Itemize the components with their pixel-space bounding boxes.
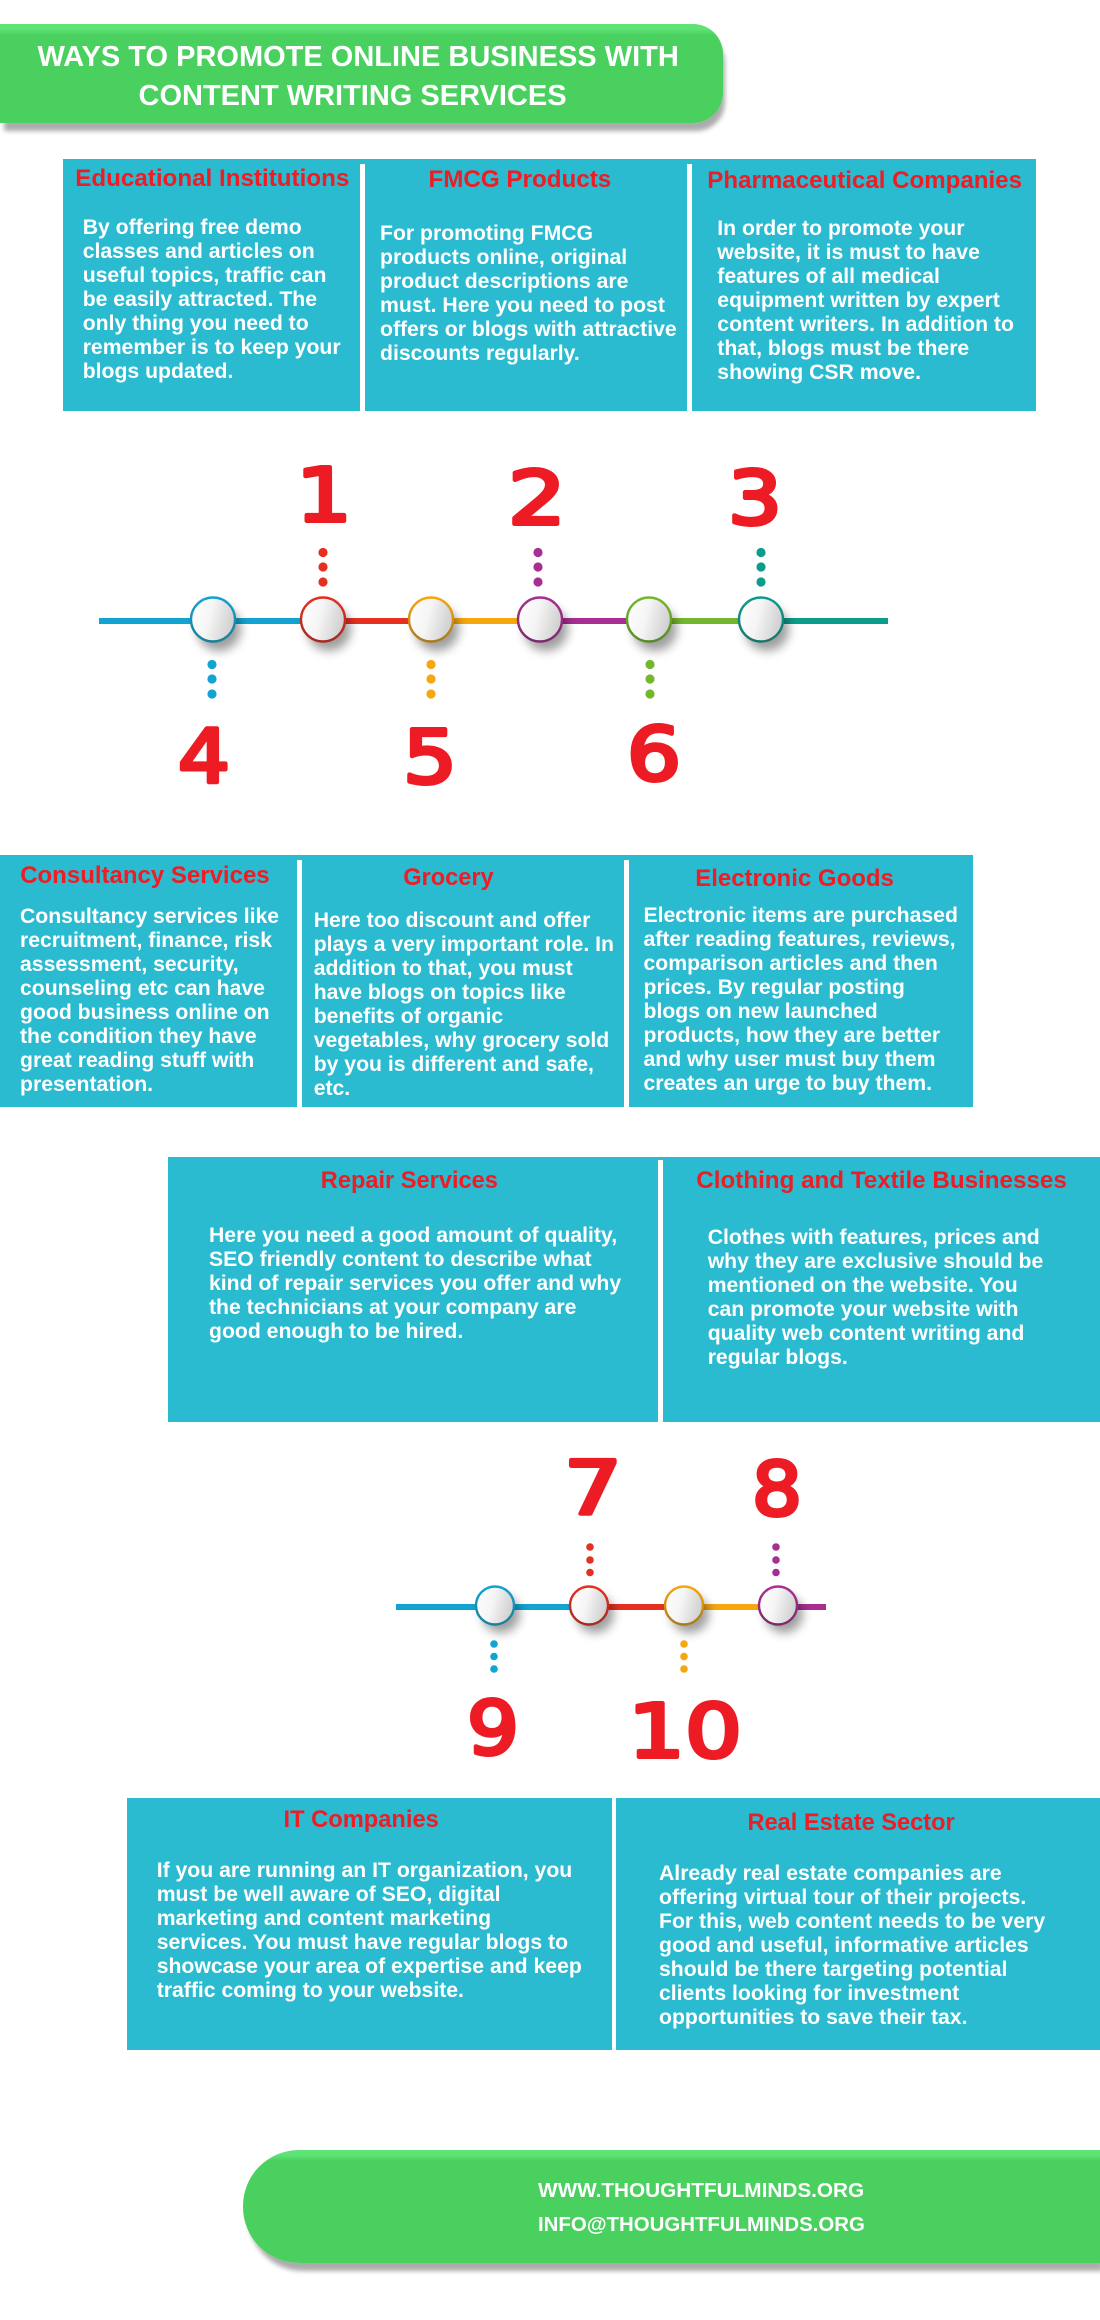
body text: remember is to keep your [83,336,341,359]
title text: CONTENT WRITING SERVICES [138,80,567,112]
node 2 [508,456,568,651]
body text [20,905,279,1096]
node 7 [564,1446,622,1633]
body text: showing CSR move. [717,361,921,384]
node 10 [628,1586,742,1775]
body text [380,222,677,365]
body text: presentation. [20,1073,153,1096]
body text: equipment written by expert [717,289,1000,312]
body text: clients looking for investment [659,1982,959,2005]
node 4: 4 [178,714,230,800]
title text: WAYS TO PROMOTE ONLINE BUSINESS WITH [38,41,679,73]
timeline 7 to 10 [396,1446,826,1775]
body text: In order to promote your [717,217,964,240]
body text: addition to that, you must [314,957,573,980]
body text [314,909,614,1100]
body text: should be there targeting potential [659,1958,1007,1981]
card: Clothing and Textile Businesses [696,1167,1067,1369]
body text: features of all medical [717,265,940,288]
body text: good business online on [20,1001,270,1024]
heading: Pharmaceutical Companies [707,167,1022,194]
heading: Repair Services [321,1168,498,1194]
body text: For promoting FMCG [380,222,593,245]
card: Educational Institutions [75,165,349,383]
body text: kind of repair services you offer and why [209,1272,621,1295]
body text: offering virtual tour of their projects. [659,1886,1026,1909]
panel: row 4 sectors [127,1798,1100,2050]
card: FMCG Products [380,166,677,365]
body text: benefits of organic [314,1005,503,1028]
body text: can promote your website with [708,1298,1018,1321]
body text [83,216,341,383]
body text: marketing and content marketing [157,1907,491,1930]
body text: plays a very important role. In [314,933,614,956]
body text: the technicians at your company are [209,1296,576,1319]
heading: Clothing and Textile Businesses [696,1167,1067,1194]
body text: after reading features, reviews, [644,928,956,951]
body text: Already real estate companies are [659,1862,1002,1885]
node 8 [752,1447,803,1633]
body text: prices. By regular posting [644,976,905,999]
body text: For this, web content needs to be very [659,1910,1045,1933]
node 9 [467,1586,520,1772]
body text: blogs updated. [83,360,233,383]
body text: classes and articles on [83,240,315,263]
body text [708,1226,1043,1369]
title text [38,41,679,112]
panel: row 3 sectors [168,1157,1100,1422]
node 5: 5 [403,715,457,801]
body text: have blogs on topics like [314,981,566,1004]
timeline line [99,618,888,624]
body text: and why user must buy them [644,1048,935,1071]
heading: Educational Institutions [75,165,349,192]
body text: traffic coming to your website. [157,1979,464,2002]
body text: content writers. In addition to [717,313,1014,336]
body text: good and useful, informative articles [659,1934,1029,1957]
heading: Real Estate Sector [748,1810,955,1836]
body text: showcase your area of expertise and keep [157,1955,582,1978]
body text: website, it is must to have [717,241,980,264]
body text: good enough to be hired. [209,1320,463,1343]
body text: vegetables, why grocery sold [314,1029,609,1052]
card: Consultancy Services [20,862,279,1096]
contact text [538,2179,865,2236]
body text: products, how they are better [644,1024,940,1047]
body text: discounts regularly. [380,342,580,365]
body text: comparison articles and then [644,952,938,975]
body text: quality web content writing and [708,1322,1024,1345]
heading: FMCG Products [428,166,611,193]
body text [659,1862,1045,2029]
body text: assessment, security, [20,953,239,976]
node 9: 9 [467,1686,519,1772]
card: Electronic Goods [644,865,958,1095]
node 1: 1 [296,453,352,539]
body text: by you is different and safe, [314,1053,594,1076]
body text: services. You must have regular blogs to [157,1931,568,1954]
body text: offers or blogs with attractive [380,318,677,341]
heading: Grocery [403,865,494,891]
node 3: 3 [728,456,782,542]
body text: creates an urge to buy them. [644,1072,932,1095]
body text: great reading stuff with [20,1049,254,1072]
timeline line [396,1604,826,1610]
body text: be easily attracted. The [83,288,317,311]
card: Repair Services [209,1168,621,1343]
body text: SEO friendly content to describe what [209,1248,592,1271]
body text: recruitment, finance, risk [20,929,272,952]
card: Grocery [314,865,614,1100]
node 4 [178,598,241,800]
timeline 1 to 6 [99,453,888,801]
body text: useful topics, traffic can [83,264,326,287]
body text: must be well aware of SEO, digital [157,1883,500,1906]
panel: row 1 sectors [63,159,1036,411]
node 10: 10 [628,1689,742,1775]
card: Pharmaceutical Companies [707,167,1022,384]
node 8: 8 [752,1447,802,1533]
node 6: 6 [627,712,681,798]
body text: the condition they have [20,1025,257,1048]
body text: that, blogs must be there [717,337,969,360]
body text: Electronic items are purchased [644,904,958,927]
heading: Consultancy Services [20,862,270,889]
body text: Clothes with features, prices and [708,1226,1040,1249]
body text: regular blogs. [708,1346,848,1369]
contact text: INFO@THOUGHTFULMINDS.ORG [538,2214,865,2236]
footer banner [243,2150,1100,2263]
card: IT Companies [157,1807,582,2002]
body text: By offering free demo [83,216,302,239]
contact text: WWW.THOUGHTFULMINDS.ORG [538,2179,864,2202]
body text: mentioned on the website. You [708,1274,1018,1297]
title banner [0,24,723,123]
body text: etc. [314,1077,350,1100]
body text: counseling etc can have [20,977,265,1000]
heading: IT Companies [284,1807,439,1833]
node 3 [728,456,789,651]
heading: Electronic Goods [695,865,894,892]
node 6 [627,598,681,798]
body text [157,1859,582,2002]
body text [717,217,1014,384]
node 5 [403,598,459,801]
body text: Here you need a good amount of quality, [209,1224,617,1247]
body text: Consultancy services like [20,905,279,928]
body text: products online, original [380,246,627,269]
panel: row 2 sectors [0,855,973,1107]
body text: why they are exclusive should be [708,1250,1043,1273]
node 7: 7 [564,1446,622,1532]
body text: blogs on new launched [644,1000,878,1023]
node 2: 2 [508,456,566,542]
body text: opportunities to save their tax. [659,2006,967,2029]
body text: product descriptions are [380,270,628,293]
body text: only thing you need to [83,312,309,335]
body text: If you are running an IT organization, you [157,1859,572,1882]
card: Real Estate Sector [659,1810,1045,2029]
body text [644,904,958,1095]
node 1 [296,453,352,651]
body text: Here too discount and offer [314,909,590,932]
body text: must. Here you need to post [380,294,665,317]
body text [209,1224,621,1343]
